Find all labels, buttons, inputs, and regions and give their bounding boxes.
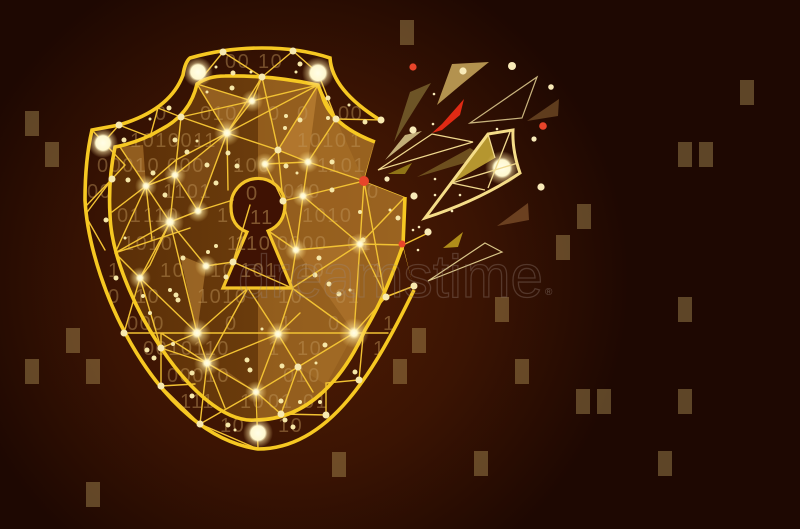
fragment: tan shard bbox=[437, 62, 489, 105]
binary digits: 01 bbox=[268, 391, 293, 413]
binary digits: 0 bbox=[328, 313, 341, 335]
binary digits: 111 bbox=[180, 391, 215, 413]
binary digits: 0 bbox=[268, 103, 281, 125]
binary digits: 1010 bbox=[297, 130, 348, 152]
fragment: pale shard bbox=[385, 131, 422, 160]
binary digits: 1 bbox=[108, 260, 121, 282]
inner shield fill bbox=[111, 78, 405, 418]
keyhole: 101 bbox=[240, 260, 278, 282]
binary digits: 10 bbox=[258, 51, 283, 73]
binary digits: 10 bbox=[160, 260, 185, 282]
binary digits: 1010 bbox=[123, 233, 174, 255]
fragment: brown shard bbox=[527, 99, 559, 121]
shattered shield fragments bbox=[378, 62, 559, 281]
binary digits: 00 bbox=[338, 103, 363, 125]
binary digits: 1010 bbox=[197, 286, 248, 308]
fragment: small olive shard bbox=[443, 232, 463, 248]
binary digits: 100 bbox=[233, 155, 271, 177]
fragment: olive shard bbox=[388, 163, 412, 174]
fragment: lower outline sliver bbox=[428, 243, 502, 281]
binary digits: 1010 bbox=[302, 205, 352, 227]
binary digits: 000 bbox=[167, 155, 205, 177]
binary digits: 1010011 bbox=[130, 130, 217, 152]
fragment: outline triangle bbox=[470, 77, 537, 123]
binary digits: 000 bbox=[127, 313, 165, 335]
small dots bbox=[104, 62, 400, 432]
junction nodes bbox=[108, 48, 418, 428]
watermark: dreamstime bbox=[238, 243, 543, 310]
binary digits: 00010 bbox=[97, 155, 160, 177]
fragment: large gem with glowing node bbox=[425, 130, 520, 218]
fragment: outlined sliver bbox=[378, 134, 473, 170]
binary digits: 1 bbox=[280, 313, 293, 335]
outer shield outline bbox=[85, 48, 414, 449]
binary digits: 01 bbox=[335, 286, 360, 308]
shield bbox=[85, 48, 428, 449]
inner shield outline bbox=[110, 76, 405, 420]
binary digits: 10 bbox=[300, 260, 325, 282]
binary digits: 1 bbox=[373, 338, 386, 360]
binary digits: 0 bbox=[108, 286, 121, 308]
spark line from red node bbox=[403, 233, 428, 245]
flying sparks bbox=[384, 62, 554, 251]
binary digits: 1011 bbox=[210, 260, 259, 282]
binary digits: 010 bbox=[283, 365, 321, 387]
binary digits: 1101 bbox=[317, 155, 366, 177]
binary digits: 10 bbox=[278, 415, 303, 437]
fragment: bronze shard bbox=[417, 148, 485, 177]
glowing nodes bbox=[88, 57, 371, 448]
keyhole: 11 bbox=[250, 207, 274, 229]
binary digits: 0 bbox=[225, 313, 238, 335]
binary digits: 010 bbox=[200, 103, 238, 125]
binary digits: 01 bbox=[303, 391, 328, 413]
binary digits: 010 bbox=[283, 181, 321, 203]
binary digits: 0 bbox=[367, 181, 380, 203]
keyhole bbox=[223, 178, 292, 288]
binary digits: 10 bbox=[278, 286, 303, 308]
keyhole: 110 bbox=[235, 233, 271, 255]
binary digits: 1 bbox=[372, 260, 385, 282]
binary digits: 10 bbox=[297, 338, 322, 360]
red nodes bbox=[359, 176, 406, 248]
fragment: lower brown shard bbox=[497, 203, 529, 226]
binary digits: 0 bbox=[297, 103, 310, 125]
binary digits: 0 bbox=[155, 103, 168, 125]
binary digits: 10 bbox=[217, 205, 242, 227]
fragment: dark gold shard bbox=[394, 83, 431, 142]
binary digits: 10 bbox=[240, 391, 265, 413]
binary digits: 1101 bbox=[163, 181, 212, 203]
binary digits: 10 bbox=[135, 286, 160, 308]
binary digits: 0000 bbox=[277, 233, 328, 255]
binary digits: 110 bbox=[227, 233, 263, 255]
binary digits: 10 bbox=[220, 415, 245, 437]
binary digits: 00 bbox=[87, 181, 112, 203]
binary digits: 00010 bbox=[167, 365, 230, 387]
binary digits: 1 bbox=[383, 313, 396, 335]
binary digits bbox=[87, 51, 396, 437]
wireframe mesh bbox=[85, 51, 414, 449]
binary digits: 00 bbox=[225, 51, 250, 73]
watermark: ® bbox=[545, 287, 553, 298]
binary digits: 1 bbox=[350, 130, 363, 152]
fragment: red shard bbox=[432, 99, 464, 133]
binary digits: 01 bbox=[347, 233, 372, 255]
binary digits: 110 bbox=[143, 205, 179, 227]
binary digits: 0010110 bbox=[143, 338, 230, 360]
binary digits: 1 bbox=[268, 338, 281, 360]
binary digits: 01 bbox=[117, 205, 142, 227]
keyhole: 0 bbox=[246, 183, 259, 205]
